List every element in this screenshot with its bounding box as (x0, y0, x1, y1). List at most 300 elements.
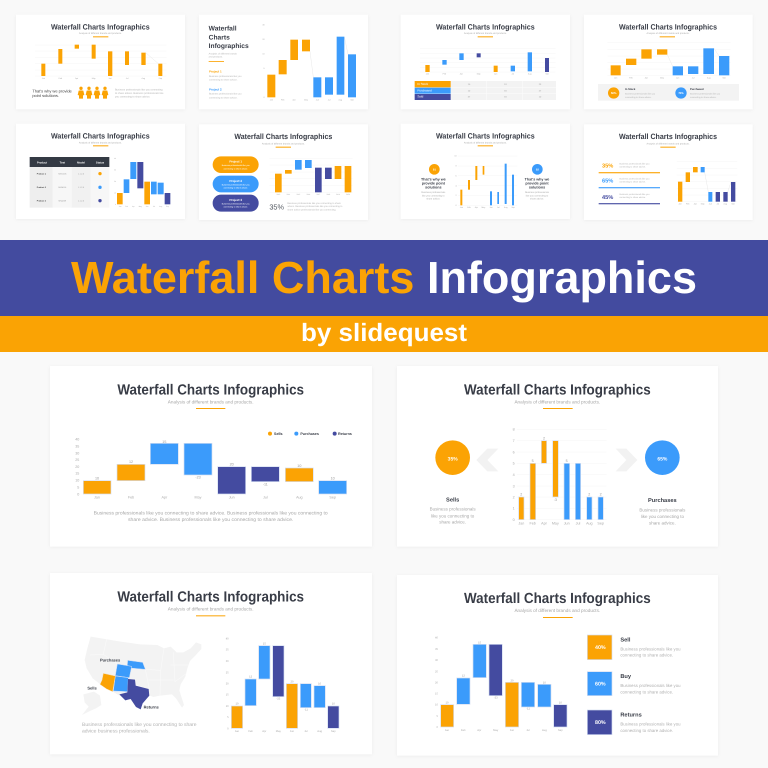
panel: slide 2 left title and waterfall: Waterfall (209, 25, 237, 32)
chart: waterfall: Apr (477, 729, 482, 732)
stat: 35%: 35% (602, 162, 613, 169)
chart: waterfall: 2018 (326, 194, 330, 196)
panel: slide 4 waterfall with stat bar: Analysis of different brands and products. (647, 32, 689, 35)
chart: waterfall: May (139, 206, 142, 208)
chart: thin waterfall: 6 (456, 175, 457, 177)
panel: slide 4 waterfall with stat bar: Waterfall Charts Infographics (619, 22, 717, 31)
arrow: left chevron (476, 449, 498, 471)
text: purchases: share advice. (649, 520, 676, 525)
panel: slide 7 thin bars with two points (401, 124, 570, 219)
legend (268, 432, 352, 436)
chart: waterfall: Sep (558, 729, 563, 732)
panel: slide 5 table and waterfall: Analysis of different brands and products. (79, 141, 122, 144)
chart: orange waterfall: Jan (42, 77, 45, 80)
project 1: connecting to share advice. (209, 79, 237, 81)
text: sells: Sells (446, 496, 459, 503)
chart: waterfall: 15 (226, 693, 229, 696)
chart: orange waterfall: May (92, 77, 96, 80)
stat: 65%: Business professionals like you (619, 178, 649, 180)
chart: waterfall: Apr (645, 77, 648, 79)
stat: 65%: connecting to share advice. (619, 181, 646, 183)
table: products: 1.1.2.5 (78, 173, 84, 175)
chart: waterfall: Jan (614, 77, 617, 79)
map: USA with highlighted states: Sells (87, 686, 97, 690)
chart: waterfall: May (660, 77, 664, 79)
table: products: Product 1 (37, 173, 46, 175)
panel: large slide circles and thin bars (397, 366, 718, 547)
text: purchases: Business professionals (639, 507, 685, 512)
chart: waterfall: 35 (226, 648, 229, 651)
chart: waterfall: 30 (435, 659, 438, 662)
chart: waterfall: 35 (435, 648, 438, 651)
chart: thin waterfall: 2 (588, 493, 590, 497)
chart: waterfall: 0 (264, 96, 265, 99)
chart: waterfall: Aug (707, 77, 710, 79)
chart: waterfall: 20 (291, 680, 294, 683)
chart: waterfall: Jun (676, 77, 679, 79)
text: sells: like you connecting to (431, 513, 474, 518)
chart: waterfall: Aug (159, 206, 162, 208)
chart: thin waterfall: Apr (475, 206, 478, 209)
chart: waterfall: 20 (511, 679, 514, 682)
panel: large slide map and waterfall (50, 573, 372, 754)
pill: project 2 (213, 176, 259, 192)
stat: 65%: 65% (602, 178, 613, 184)
stat: sell 40%: connecting to share advice. (620, 653, 673, 658)
table: stock, purchased, sold: Sold (417, 95, 423, 98)
table: products: MW4116 (58, 186, 66, 189)
table: stock, purchased, sold: 24 (504, 83, 507, 86)
chart: waterfall: 10 (543, 681, 546, 684)
point 02: solutions (529, 185, 545, 189)
stat: 45%: 45% (602, 194, 613, 200)
text: sells: share advice. (439, 520, 466, 525)
chart: waterfall (435, 636, 567, 732)
chart: waterfall: 12 (462, 674, 465, 677)
chart: thin waterfall: Jul (576, 522, 580, 526)
table: stock, purchased, sold: 34 (504, 90, 507, 92)
legend: Purchases (300, 432, 319, 436)
chart: waterfall: -11 (526, 707, 530, 710)
chart: waterfall: Sep (331, 730, 336, 733)
chart: waterfall: May (304, 99, 308, 101)
chart: waterfall: May (477, 73, 481, 75)
chart: orange waterfall: Jun (108, 77, 112, 80)
panel: large slide circles and thin bars: Analysis of different brands and products. (514, 399, 600, 404)
panel: slide 5 table and waterfall: Waterfall Charts Infographics (51, 131, 150, 140)
stat bar: Business professionals like you (625, 93, 655, 95)
chart: waterfall: 40 (114, 158, 116, 160)
stat: buy 60%: Buy (620, 673, 631, 679)
chart: waterfall: 2020 (346, 194, 350, 196)
table: stock, purchased, sold: 10 (468, 90, 470, 92)
chart: waterfall: May (493, 729, 498, 732)
stat bar: In Stock (625, 88, 636, 91)
table: products (30, 157, 109, 208)
stat bar: connecting to share advice. (625, 96, 651, 99)
point 01: That's why we (421, 178, 446, 182)
chart: thin waterfall: Sep (597, 522, 604, 526)
chart: waterfall: Apr (161, 496, 167, 500)
chart: waterfall: Jan (119, 206, 121, 208)
stat: 35%: connecting to share advice. (619, 166, 646, 168)
stat: sell 40%: Sell (620, 636, 630, 643)
chart: thin waterfall: Feb (530, 522, 536, 526)
circle: purchases 65%: 65% (657, 456, 667, 462)
point 01: like you connecting to (422, 194, 445, 197)
chart: waterfall: Jul (304, 730, 308, 733)
chart: thin waterfall: Jul (497, 206, 500, 209)
chart: waterfall: Feb (128, 496, 134, 500)
chart: waterfall: 10 (114, 192, 116, 194)
chart: waterfall: 20 (226, 682, 229, 685)
chart: thin waterfall: Jun (564, 522, 570, 526)
chart: waterfall: Sep (350, 99, 354, 101)
chart: thin waterfall: Aug (504, 206, 507, 209)
chart: waterfall: 5 (437, 715, 438, 718)
chart: thin waterfall (513, 428, 607, 526)
panel: slide 2 left title and waterfall: Infographics (209, 42, 249, 50)
chart: thin waterfall: May (552, 522, 559, 526)
chart: waterfall: 30 (262, 24, 265, 26)
chart: waterfall (75, 438, 347, 500)
chart: waterfall: 10 (236, 702, 239, 705)
chart: waterfall: Feb (461, 729, 466, 732)
chart: waterfall: 15 (478, 641, 481, 644)
panel: slide 8 percent list and waterfall: Waterfall Charts Infographics (619, 132, 717, 141)
stat: 35% (599, 162, 660, 173)
text: purchases (639, 497, 685, 525)
callout text: That's why we provide (32, 89, 72, 94)
chart: waterfall: 25 (435, 670, 438, 673)
point 02: Business professionals (525, 191, 549, 194)
panel: slide 2 left title and waterfall (199, 15, 368, 109)
text block: Business professionals like you connecting to share (82, 722, 197, 727)
text block: Business professionals like you connecting to share (287, 202, 341, 205)
chart: waterfall: Aug (339, 99, 342, 101)
project 2 (209, 88, 241, 99)
banner: main title (0, 240, 768, 316)
panel: large slide waterfall and percent squares (397, 575, 718, 756)
chart: orange waterfall: Feb (59, 77, 62, 80)
chart: thin waterfall: Aug (586, 522, 593, 526)
chart: waterfall (420, 49, 556, 75)
chart: waterfall: 5 (77, 485, 79, 489)
pill: project 1 (213, 156, 259, 173)
chart: waterfall: May (701, 203, 705, 205)
stat: sell 40%: Business professionals like you (620, 646, 681, 651)
heading: Waterfall Charts Infographics (117, 589, 304, 605)
panel: slide 8 percent list and waterfall (584, 124, 753, 220)
chart: waterfall: 20 (230, 463, 234, 467)
chart: orange waterfall: Aug (142, 77, 145, 80)
chart: waterfall: Feb (125, 206, 128, 208)
chart: waterfall: 30 (75, 451, 79, 455)
pill: project 3 (213, 195, 259, 212)
table: products: Product 3 (37, 200, 46, 202)
pill: project 1: connecting to share advice. (223, 168, 248, 170)
panel: slide 2 left title and waterfall: Charts (209, 34, 230, 41)
table: products: MW1206 (58, 173, 67, 175)
chart: thin waterfall: -3 (554, 498, 557, 502)
stat bar: 50% (611, 92, 616, 95)
table: stock, purchased, sold: 10 (539, 96, 541, 98)
chart: thin waterfall: Apr (541, 522, 547, 526)
chart: waterfall: 12 (249, 675, 252, 678)
chart: waterfall: Aug (542, 729, 547, 732)
table: products: Model (77, 161, 85, 164)
chart: thin waterfall: Sep (511, 206, 515, 209)
chart: waterfall: 20 (75, 465, 79, 469)
chart: waterfall: 5 (264, 67, 265, 70)
text block: to share advice. Business professionals like (115, 92, 163, 95)
panel: slide 2 left title and waterfall: Analysis of different brands (209, 53, 237, 55)
chart: waterfall: Aug (724, 203, 727, 205)
banner: main title: Waterfall Charts Infographics (71, 252, 697, 303)
chart: thin waterfall: Feb (467, 206, 471, 209)
chart: orange waterfall: Apr (75, 77, 78, 80)
legend: Sells (274, 432, 283, 436)
chart: waterfall: Feb (629, 77, 633, 79)
panel: slide 3 waterfall with table (401, 15, 570, 109)
point 01 (421, 164, 446, 200)
stat: 65% (599, 178, 660, 188)
chart: waterfall: 20 (262, 38, 265, 41)
chart: waterfall: Jan (94, 496, 100, 500)
heading: Waterfall Charts Infographics (117, 381, 304, 398)
chart: waterfall: 40 (75, 438, 79, 442)
point 01: 01 (433, 168, 436, 171)
stat: returns 80% (587, 710, 681, 735)
chart: waterfall: 2013 (276, 194, 280, 196)
chart: thin waterfall: 4 (513, 473, 515, 477)
chart: waterfall: Jun (146, 206, 148, 208)
project 1: Business professionals like you (209, 75, 241, 78)
text: purchases: Purchases (648, 497, 677, 503)
chart: waterfall: Apr (694, 203, 697, 205)
chart: waterfall: -11 (263, 482, 268, 486)
chart: thin waterfall: 0 (513, 518, 515, 522)
arrow: right chevron (616, 449, 637, 471)
chart: waterfall: 25 (226, 671, 229, 674)
table: stock, purchased, sold: In Stock (417, 82, 428, 86)
pill: project 1: Business professionals like you (222, 165, 250, 167)
chart: waterfall: 10 (446, 701, 449, 704)
table: stock, purchased, sold: 23 (539, 83, 541, 86)
chart: waterfall: 2016 (306, 194, 310, 196)
pill: project 2: connecting to share advice. (223, 187, 248, 189)
chart: waterfall: Apr (262, 730, 267, 733)
stat bar: connecting to share advice. (690, 96, 716, 99)
panel: slide 1 orange waterfall with people: Analysis of different brands and products. (79, 32, 122, 35)
chart: waterfall: May (276, 730, 281, 733)
table: products: Test (60, 161, 65, 164)
point 01: share advice. (426, 198, 440, 200)
stat: buy 60%: 60% (595, 681, 606, 687)
chart: waterfall: 12 (129, 460, 133, 464)
chart: waterfall: 0 (115, 204, 116, 206)
map: USA with highlighted states (82, 637, 201, 715)
text block: you connecting to share advice. (115, 95, 150, 98)
chart: waterfall (607, 43, 731, 79)
text: sells: Business professionals (430, 507, 476, 512)
text block: Business professionals like you connecting (115, 88, 163, 91)
chart: waterfall: Apr (292, 99, 296, 101)
chart: waterfall: 15 (162, 440, 166, 444)
chart: waterfall: 10 (435, 703, 438, 706)
circle: purchases 65% (645, 440, 680, 475)
chart: waterfall: Sep (166, 206, 169, 208)
table: products: Product (37, 161, 47, 164)
chart: waterfall: Apr (132, 206, 135, 208)
stat: 35%: 35% (269, 203, 284, 211)
table: products: 1.1.2.5 (78, 200, 84, 202)
stat: returns 80%: connecting to share advice. (620, 728, 673, 733)
chart: waterfall: 10 (318, 682, 321, 685)
chart: thin waterfall: 1 (513, 507, 515, 511)
point 01: Business professionals (421, 191, 445, 194)
table: products: 1.1.2.5 (78, 186, 84, 189)
chart: waterfall: Jun (290, 730, 294, 733)
chart: waterfall: Jul (692, 77, 694, 79)
chart: waterfall: 10 (331, 476, 335, 480)
panel: large slide sells purchases returns (50, 366, 372, 547)
chart: waterfall: 10 (262, 53, 265, 55)
table: stock, purchased, sold: 47 (468, 96, 470, 98)
chart: thin waterfall: 2 (456, 194, 457, 197)
point 01: provide point (422, 181, 445, 185)
chart: thin waterfall: 5 (566, 459, 568, 463)
chart: thin waterfall: 5 (532, 459, 534, 463)
chart: thin waterfall: 2 (513, 495, 515, 499)
table: products: Status (96, 161, 104, 164)
chart: waterfall: 0 (77, 492, 79, 496)
chart: waterfall: Feb (686, 203, 690, 205)
chart: waterfall: Sep (545, 73, 549, 75)
chart: waterfall: Jan (235, 730, 239, 733)
chart: thin waterfall: 7 (513, 439, 515, 443)
chart: waterfall (269, 158, 353, 196)
chart: thin waterfall: Jun (489, 206, 493, 209)
stat: sell 40% (587, 635, 681, 660)
chart: waterfall: Jul (328, 99, 330, 101)
chart: waterfall: 20 (114, 181, 116, 183)
stat: returns 80%: 80% (595, 720, 606, 725)
stat: returns 80%: Returns (620, 712, 642, 718)
chart: thin waterfall: Jan (518, 522, 524, 526)
chart: orange waterfall: Sep (159, 77, 162, 80)
chart: waterfall: 10 (559, 701, 562, 704)
chart: thin waterfall: 2 (543, 436, 545, 440)
chart: waterfall: Jun (709, 203, 712, 205)
heading: Waterfall Charts Infographics (464, 381, 651, 398)
pill: project 3: Project 3 (229, 198, 242, 202)
pill: project 3: Business professionals like you (222, 203, 250, 205)
table: stock, purchased, sold: Purchased (417, 89, 432, 92)
table: products: Product 2 (37, 186, 46, 189)
chart: waterfall (226, 637, 339, 733)
chart: waterfall: 30 (226, 660, 229, 663)
chart: waterfall: Jun (316, 99, 319, 101)
chart: waterfall: 35 (75, 444, 79, 448)
chart: waterfall: Jun (510, 729, 514, 732)
panel: slide 6 pills and waterfall (199, 124, 368, 220)
point 02: That's why we (525, 178, 549, 182)
panel: slide 7 thin bars with two points: Analysis of different brands and products. (464, 141, 507, 144)
pill: project 1: Project 1 (229, 160, 242, 163)
project 1 (209, 70, 241, 81)
chart: waterfall: 10 (297, 464, 301, 468)
legend: Returns (338, 432, 352, 436)
chart: waterfall: Sep (722, 77, 726, 79)
panel: slide 4 waterfall with stat bar (584, 15, 753, 109)
point 02: share advice. (530, 198, 544, 200)
chart: waterfall: 2019 (336, 194, 340, 196)
icons: four people (78, 87, 108, 99)
chart: thin waterfall: 3 (513, 484, 515, 488)
map: USA with highlighted states: Returns (144, 705, 159, 709)
chart: waterfall: Aug (528, 73, 531, 75)
chart: waterfall: Jul (716, 203, 719, 205)
chart: waterfall: Jul (263, 496, 268, 500)
banner: by slidequest: by slidequest (301, 319, 468, 347)
chart: waterfall: Jun (494, 73, 497, 75)
chart: waterfall: Aug (296, 496, 303, 500)
text block: share advice professionals like you connecting. (287, 208, 336, 211)
panel: slide 6 pills and waterfall: Analysis of different brands and products. (262, 142, 305, 145)
stat: sell 40%: 40% (595, 645, 606, 650)
chart: waterfall (114, 158, 170, 208)
chart: waterfall: 10 (332, 702, 335, 705)
chart: waterfall: Jan (426, 73, 429, 75)
chart: waterfall: Jul (153, 206, 155, 208)
chart: waterfall: 15 (75, 472, 79, 476)
chart: waterfall: 2014 (286, 194, 290, 196)
stat bar: Purchased (690, 88, 704, 91)
panel: slide 1 orange waterfall with people (16, 15, 185, 109)
panel: large slide waterfall and percent squares: Analysis of different brands and products. (514, 608, 600, 613)
chart: waterfall: 10 (95, 476, 99, 480)
chart: waterfall: 0 (437, 726, 438, 729)
chart: waterfall: Jan (678, 203, 682, 205)
text block: advice. Business professionals like you connecting to (287, 205, 342, 208)
panel: large slide map and waterfall: Analysis of different brands and products. (168, 606, 254, 611)
chart: waterfall (262, 24, 356, 101)
panel: slide 7 thin bars with two points: Waterfall Charts Infographics (436, 131, 535, 140)
chart: waterfall: -23 (276, 697, 280, 700)
chart: thin waterfall: 5 (513, 462, 515, 466)
chart: waterfall: Sep (329, 496, 336, 500)
point 02: 02 (536, 168, 539, 171)
project 2: connecting to share advice. (209, 96, 237, 99)
stat bar (598, 84, 739, 101)
chart: waterfall: May (195, 496, 202, 500)
chart: waterfall (677, 162, 737, 205)
chart: waterfall: 2015 (296, 194, 300, 196)
panel: slide 3 waterfall with table: Waterfall Charts Infographics (436, 22, 535, 31)
chart: waterfall: 10 (226, 705, 229, 708)
panel: large slide sells purchases returns: Analysis of different brands and products. (168, 399, 254, 404)
chart: waterfall: 2017 (316, 194, 320, 196)
table: products: MN4209 (59, 200, 66, 202)
circle: sells 35%: 35% (448, 456, 458, 462)
chart: waterfall: 20 (435, 681, 438, 684)
project 2: Business professionals like you (209, 93, 241, 95)
table: stock, purchased, sold: 34 (504, 96, 507, 98)
text: purchases: like you connecting to (641, 514, 684, 519)
chart: thin waterfall (454, 155, 517, 209)
stat bar: 70% (678, 92, 684, 95)
